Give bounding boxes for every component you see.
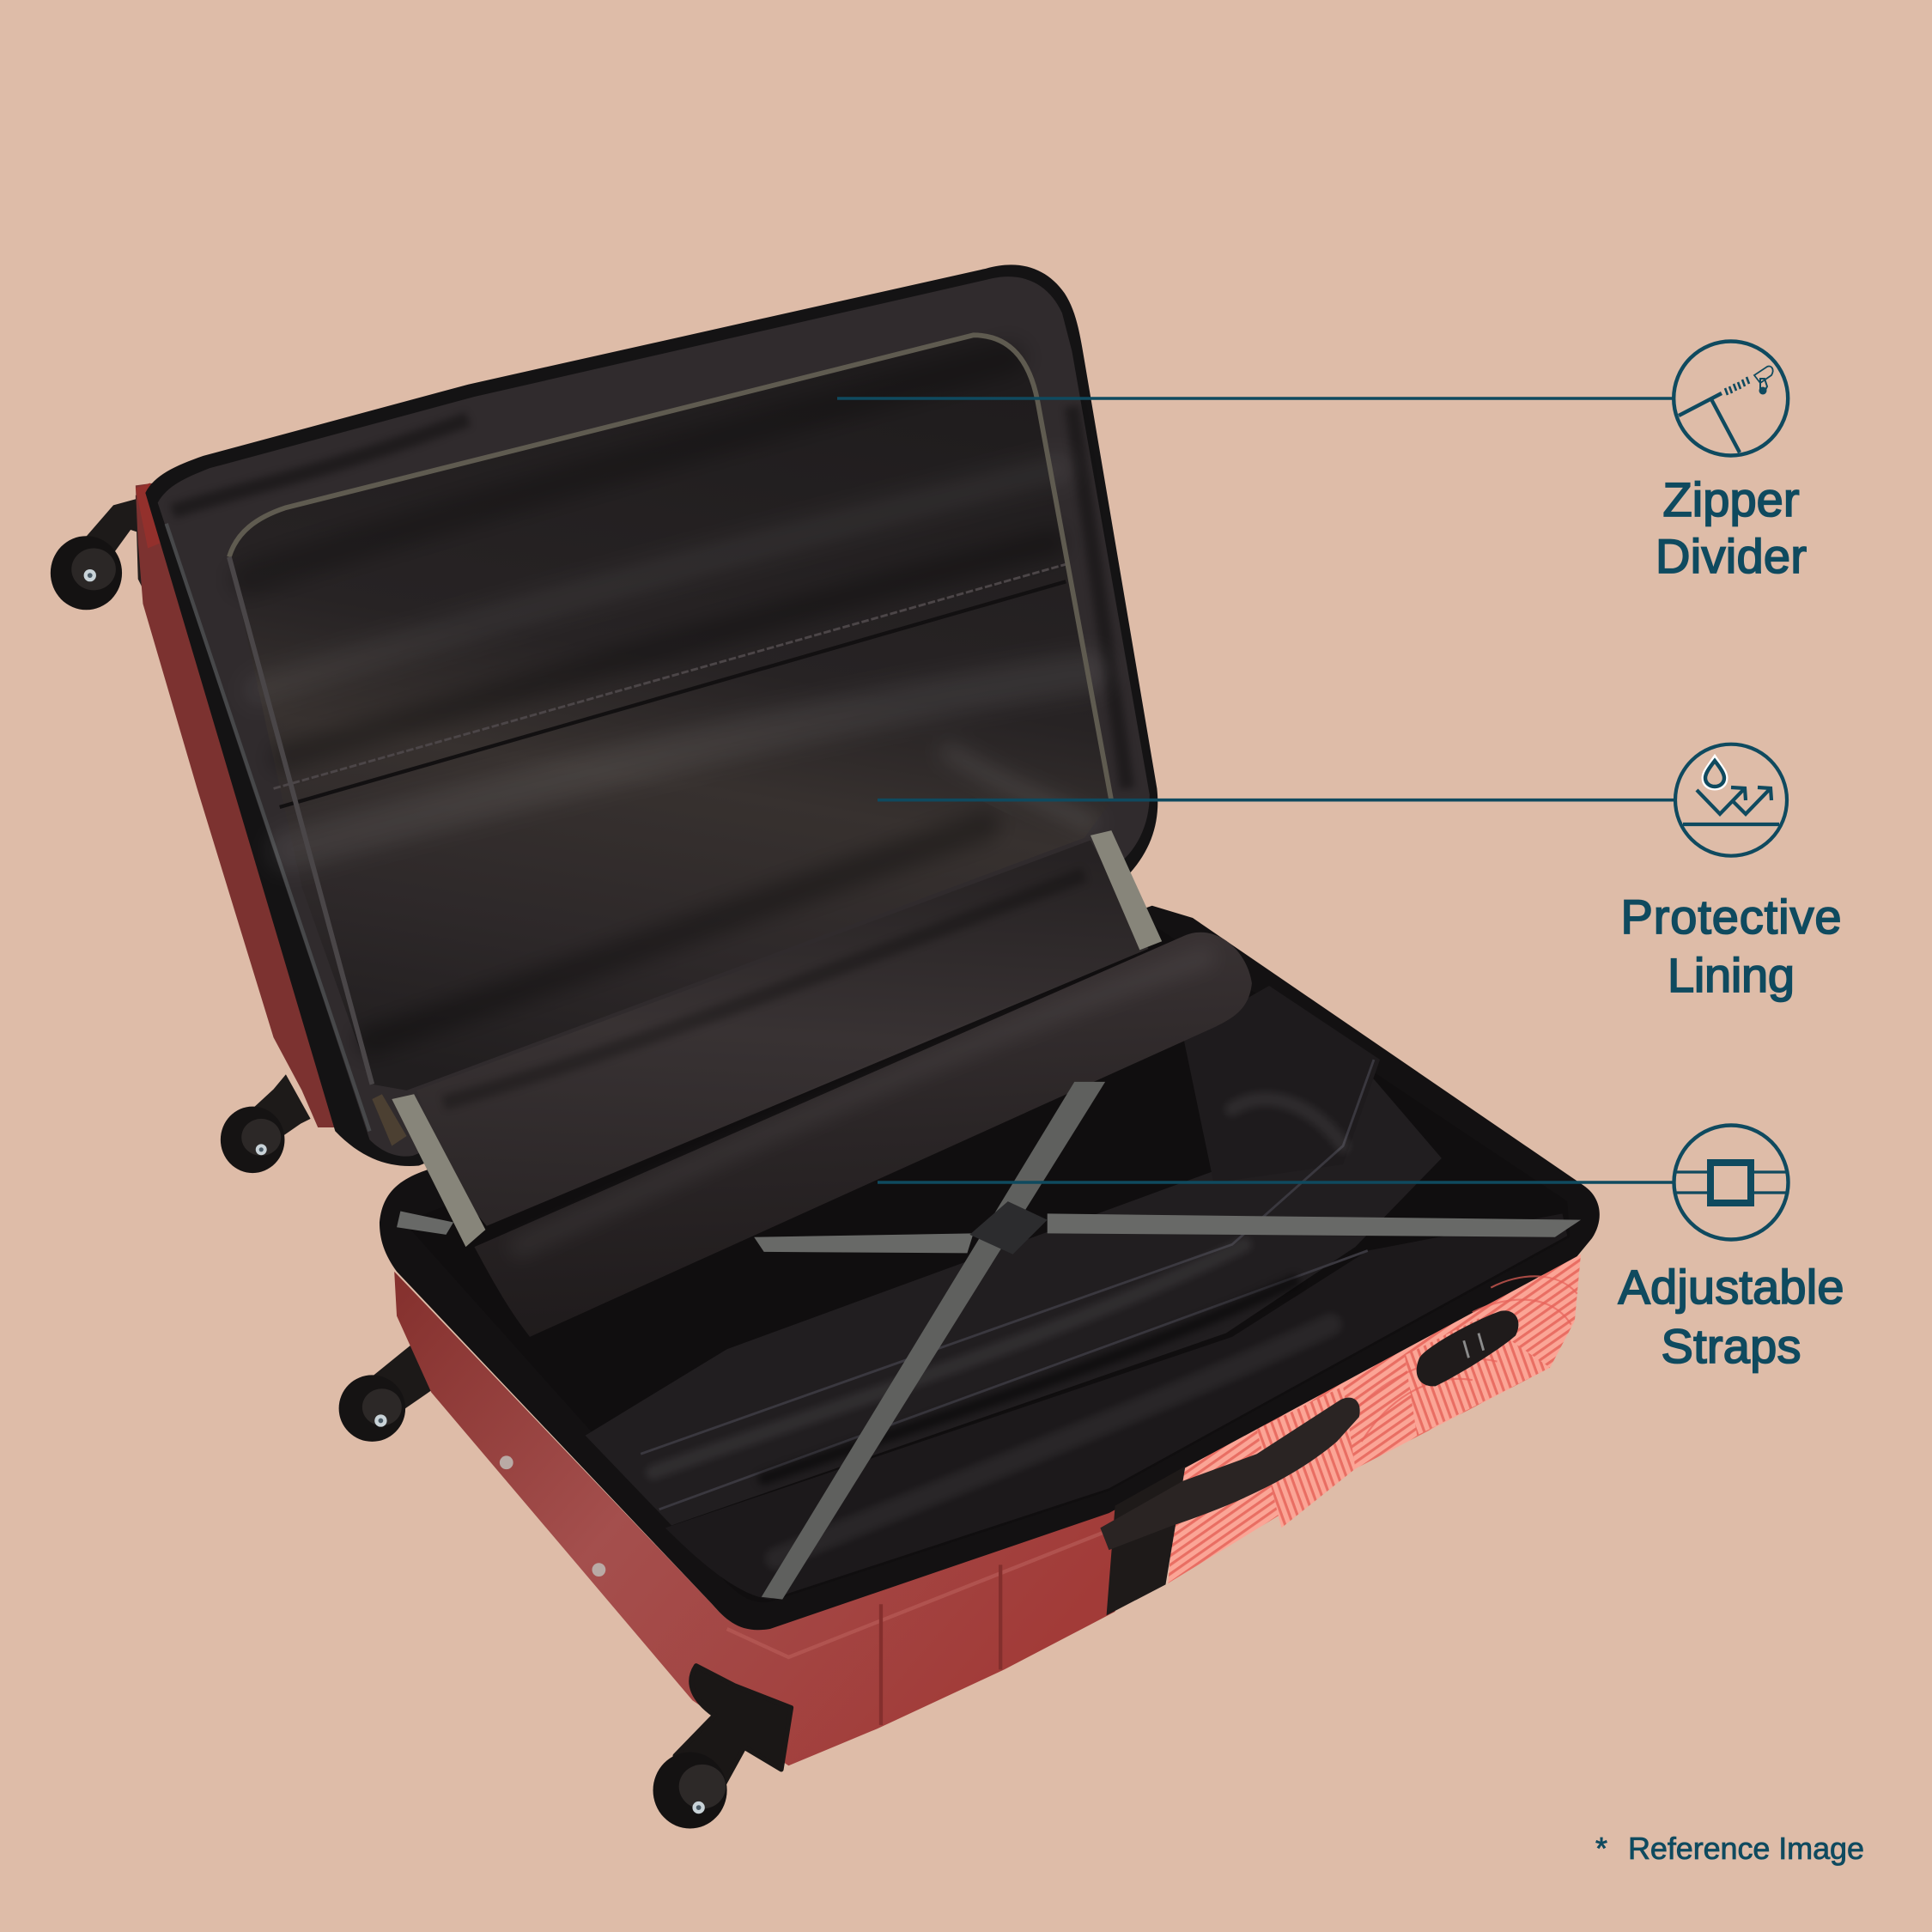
strap buckle: [969, 1201, 1048, 1255]
lower lid flap: [416, 841, 1148, 1226]
wheel: rear left of base: [339, 1340, 437, 1442]
footnote: reference image: Reference Image: [1628, 1831, 1864, 1866]
zipper tape around panel: [229, 335, 1111, 801]
callout line: protective lining: [878, 799, 1674, 802]
label: zipper divider: Divider: [1656, 529, 1807, 583]
wheel: upper left: [51, 490, 148, 610]
lining wrinkles: [246, 357, 1091, 1042]
icon: protective lining: [1675, 744, 1787, 856]
base shell: [394, 1272, 1115, 1765]
label: protective lining: Lining: [1668, 948, 1795, 1002]
label: adjustable straps: Adjustable: [1618, 1260, 1844, 1314]
shell ridges and rivets: [500, 1455, 1000, 1725]
khaki zipper tapes: [372, 830, 1162, 1247]
label: zipper divider: [1656, 472, 1807, 583]
label: protective lining: Protective: [1621, 890, 1841, 944]
callout line: zipper divider: [837, 397, 1673, 400]
callout line: adjustable straps: [878, 1181, 1673, 1184]
icon: zipper divider: [1674, 342, 1788, 455]
footnote: reference image: *: [1595, 1831, 1607, 1866]
lid inner panel: [229, 335, 1111, 1091]
lid shell: [136, 483, 335, 1127]
compression straps: [397, 1082, 1581, 1600]
label: adjustable straps: [1618, 1260, 1844, 1373]
lid padded lining: [158, 276, 1150, 1157]
lid rim: [145, 264, 1157, 1166]
base interior: [404, 924, 1570, 1602]
label: protective lining: [1621, 890, 1841, 1002]
patterned side panel: [1168, 1255, 1581, 1583]
carry handle: [1100, 1398, 1360, 1615]
fabric folds: [641, 1060, 1374, 1510]
pocket seam: [274, 564, 1066, 788]
base rim: [380, 906, 1600, 1630]
label: adjustable straps: Straps: [1661, 1319, 1801, 1373]
combination lock: [1417, 1310, 1518, 1386]
wheel: lower left of lid: [221, 1074, 311, 1173]
rolled lining: [474, 933, 1252, 1337]
icon: adjustable straps: [1674, 1125, 1788, 1240]
wheel: front corner of base: [653, 1666, 791, 1828]
suitcase photo illustration: [51, 264, 1600, 1828]
label: zipper divider: Zipper: [1662, 472, 1800, 526]
